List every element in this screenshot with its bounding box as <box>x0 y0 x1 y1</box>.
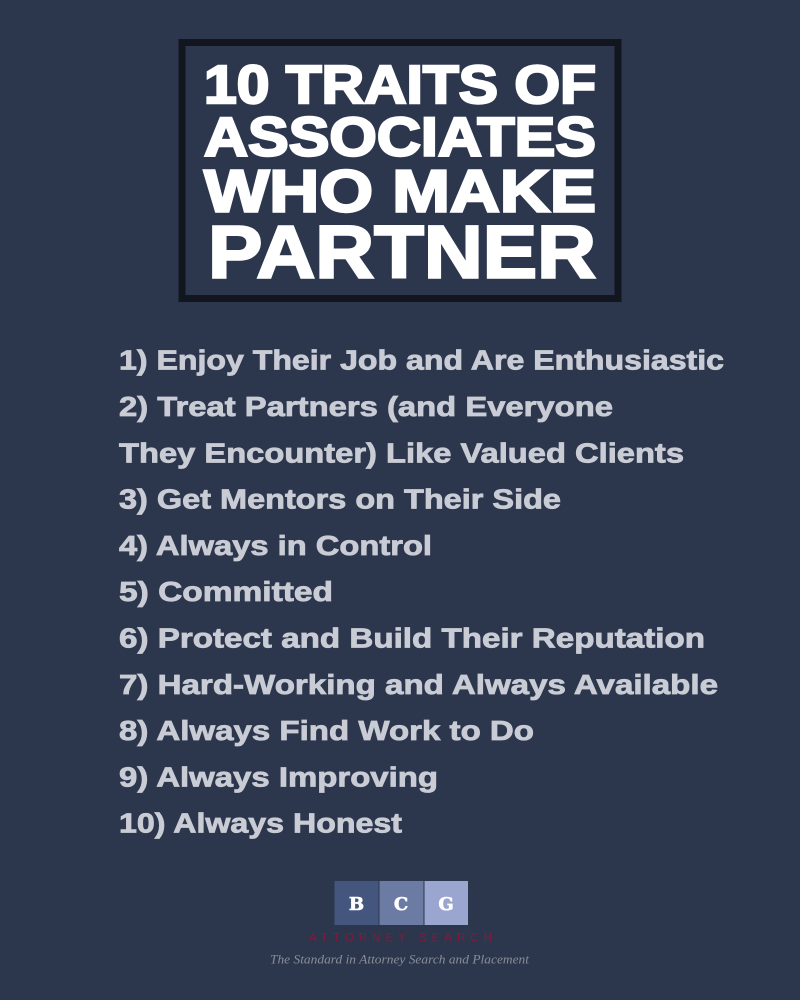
logo square B <box>334 881 378 925</box>
tagline: The Standard in Attorney Search and Placement <box>270 952 529 966</box>
trait 1: 1) Enjoy Their Job and Are Enthusiastic <box>119 345 724 376</box>
logo square C <box>380 881 424 925</box>
title: line 1: 10 TRAITS OF <box>204 55 596 115</box>
title: line 2: ASSOCIATES <box>204 106 596 168</box>
trait 10: 10) Always Honest <box>119 808 402 839</box>
trait 2 second line: They Encounter) Like Valued Clients <box>119 437 684 468</box>
title box <box>182 42 618 298</box>
trait 7: 7) Hard-Working and Always Available <box>119 669 718 700</box>
trait 8: 8) Always Find Work to Do <box>119 715 534 746</box>
title: line 3: WHO MAKE <box>204 158 596 224</box>
trait 2 first line: 2) Treat Partners (and Everyone <box>119 391 613 422</box>
logo square C: C <box>394 894 408 915</box>
logo square G <box>424 881 468 925</box>
BCG logo <box>270 881 529 966</box>
trait 6: 6) Protect and Build Their Reputation <box>119 622 705 654</box>
logo wordmark: ATTORNEY SEARCH <box>309 932 492 944</box>
trait 9: 9) Always Improving <box>119 761 438 792</box>
logo square B: B <box>349 894 364 915</box>
trait 5: 5) Committed <box>119 576 333 607</box>
trait 3: 3) Get Mentors on Their Side <box>119 484 561 515</box>
list of ten traits <box>119 345 724 839</box>
title: line 4: PARTNER <box>208 210 596 294</box>
logo square G: G <box>438 894 454 915</box>
trait 4: 4) Always in Control <box>119 530 432 561</box>
